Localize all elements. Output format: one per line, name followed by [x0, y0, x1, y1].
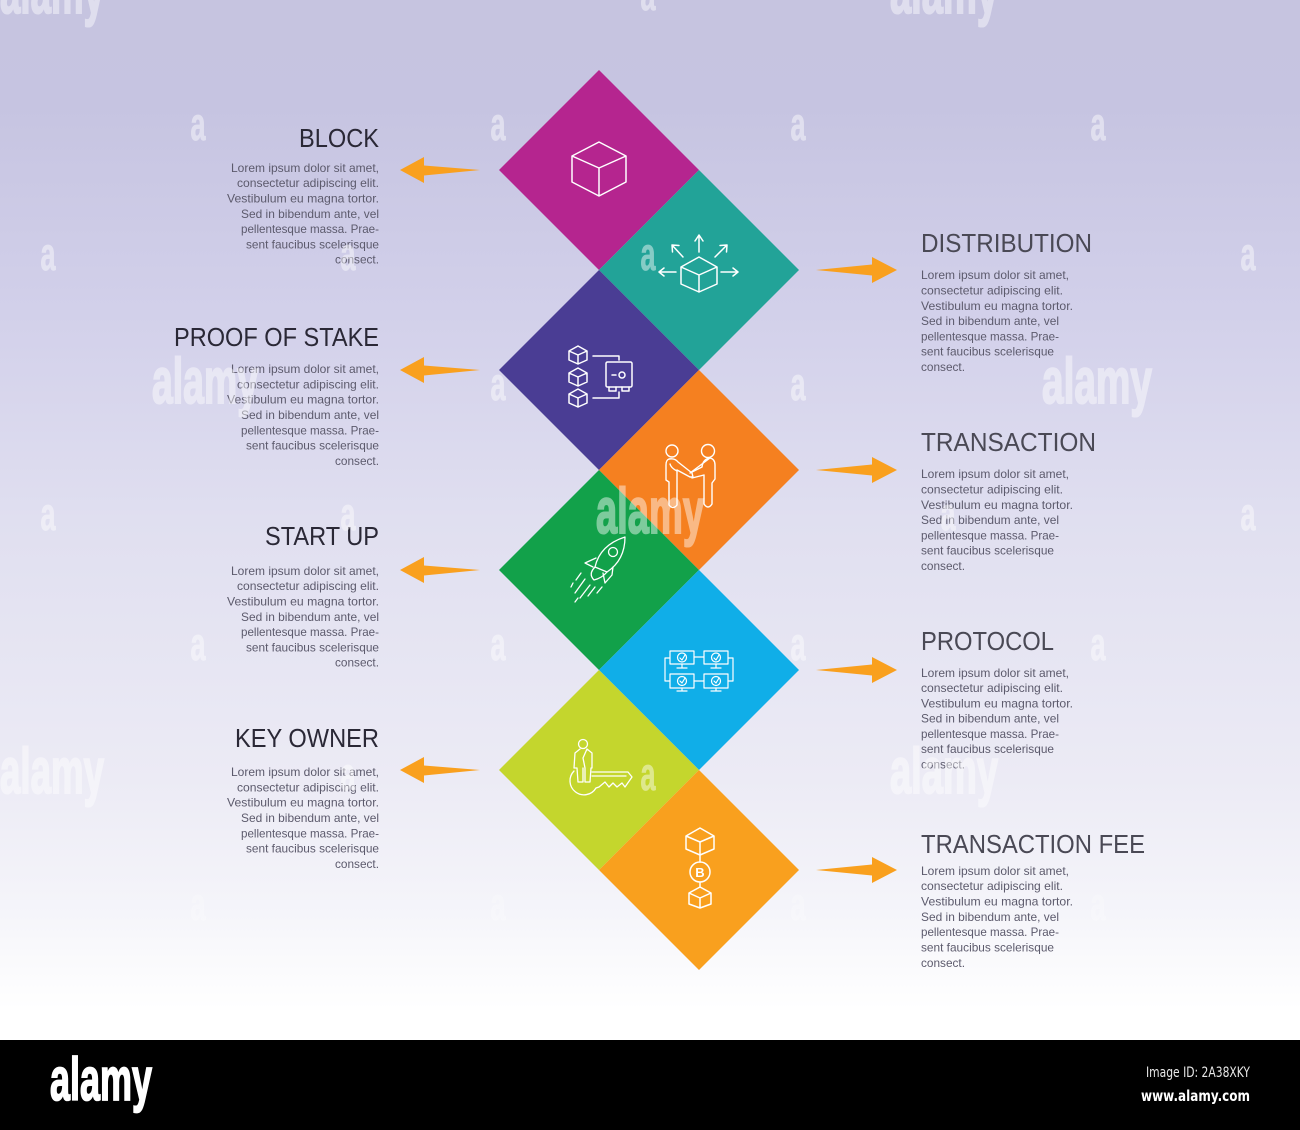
icon: rocket	[571, 537, 625, 602]
arrow: key owner	[400, 757, 480, 783]
text block: block: sent faucibus scelerisque	[246, 238, 379, 252]
watermarks: a	[940, 488, 956, 540]
text block: transaction	[921, 427, 1096, 573]
text block: proof of stake	[174, 322, 379, 468]
watermarks: a	[490, 878, 506, 930]
text block: transaction: pellentesque massa. Prae-	[921, 528, 1059, 542]
text block: transaction fee: pellentesque massa. Prae-	[921, 925, 1059, 939]
watermarks: alamy	[1042, 345, 1152, 417]
text block: proof of stake: pellentesque massa. Prae-	[241, 424, 379, 438]
watermarks: a	[640, 748, 656, 800]
text block: transaction fee: Lorem ipsum dolor sit amet,	[921, 864, 1069, 878]
text block: protocol: sent faucibus scelerisque	[921, 742, 1054, 756]
watermarks: a	[1240, 228, 1256, 280]
text block: protocol: Vestibulum eu magna tortor.	[921, 696, 1073, 710]
text block: distribution: Sed in bibendum ante, vel	[921, 314, 1059, 328]
logo: alamy	[50, 1046, 152, 1113]
heading: proof of stake: PROOF OF STAKE	[174, 322, 379, 352]
watermarks: alamy	[0, 735, 104, 807]
watermarks: a	[190, 878, 206, 930]
text block: start up	[227, 521, 379, 670]
text block: proof of stake: Sed in bibendum ante, vel	[241, 408, 379, 422]
text block: proof of stake: consectetur adipiscing elit.	[237, 378, 379, 392]
text block: start up: pellentesque massa. Prae-	[241, 625, 379, 639]
text block: protocol	[921, 626, 1073, 772]
heading: distribution: DISTRIBUTION	[921, 228, 1092, 258]
watermarks: a	[340, 488, 356, 540]
text block: block	[227, 123, 380, 266]
icon: monitor network	[665, 651, 733, 691]
text block: distribution: pellentesque massa. Prae-	[921, 330, 1059, 344]
site url: www.alamy.com	[1141, 1087, 1250, 1105]
arrow: transaction fee	[816, 857, 897, 883]
heading: protocol: PROTOCOL	[921, 626, 1054, 656]
text block: key owner	[227, 723, 379, 871]
text block: key owner: Sed in bibendum ante, vel	[241, 811, 379, 825]
watermarks: a	[640, 228, 656, 280]
diamond: block	[499, 70, 699, 270]
heading: block: BLOCK	[299, 123, 380, 153]
text block: key owner: Lorem ipsum dolor sit amet,	[231, 765, 379, 779]
arrow: transaction	[816, 457, 897, 483]
watermarks: a	[340, 748, 356, 800]
watermarks: a	[190, 618, 206, 670]
text block: transaction: Vestibulum eu magna tortor.	[921, 498, 1073, 512]
watermarks: a	[40, 488, 56, 540]
watermarks: a	[490, 98, 506, 150]
text block: proof of stake: Lorem ipsum dolor sit amet,	[231, 362, 379, 376]
diamond: transaction	[599, 370, 799, 570]
text block: transaction: sent faucibus scelerisque	[921, 544, 1054, 558]
text block: distribution	[921, 228, 1092, 374]
arrow: start up	[400, 557, 480, 583]
text block: protocol: Lorem ipsum dolor sit amet,	[921, 666, 1069, 680]
watermarks: a	[1240, 488, 1256, 540]
footer bar	[0, 1040, 1300, 1130]
text block: start up: sent faucibus scelerisque	[246, 640, 379, 654]
watermarks	[0, 0, 1256, 930]
panel: diamonds and icons	[499, 70, 799, 970]
watermarks: a	[790, 878, 806, 930]
icon label: bitcoin glyph: B	[695, 865, 705, 880]
text block: block: consect.	[335, 252, 379, 266]
text block: distribution: Vestibulum eu magna tortor.	[921, 299, 1073, 313]
text block: transaction fee: Sed in bibendum ante, vel	[921, 910, 1059, 924]
text block: distribution: sent faucibus scelerisque	[921, 344, 1054, 358]
heading: key owner: KEY OWNER	[235, 723, 379, 753]
text block: proof of stake: Vestibulum eu magna tortor.	[227, 392, 379, 406]
watermarks: a	[790, 98, 806, 150]
text block: transaction: Sed in bibendum ante, vel	[921, 513, 1059, 527]
text block: transaction fee: sent faucibus scelerisque	[921, 940, 1054, 954]
text block: proof of stake: sent faucibus scelerisque	[246, 438, 379, 452]
heading: transaction fee: TRANSACTION FEE	[921, 829, 1145, 859]
icon: handshake	[666, 444, 715, 508]
arrow: distribution	[816, 257, 897, 283]
icon: cubes and safe	[569, 346, 632, 407]
text block: start up: consect.	[335, 656, 379, 670]
watermarks: a	[1090, 98, 1106, 150]
icon: bitcoin chain	[686, 828, 714, 908]
watermarks: a	[340, 228, 356, 280]
text block: start up: Sed in bibendum ante, vel	[241, 610, 379, 624]
diamond: proof of stake	[499, 270, 699, 470]
heading: transaction: TRANSACTION	[921, 427, 1096, 457]
text block: protocol: pellentesque massa. Prae-	[921, 727, 1059, 741]
icon: cube	[572, 142, 626, 196]
image id: Image ID: 2A38XKY	[1146, 1065, 1250, 1081]
text block: transaction: consectetur adipiscing elit.	[921, 482, 1063, 496]
text block: transaction fee: consect.	[921, 956, 965, 970]
text block: key owner: sent faucibus scelerisque	[246, 842, 379, 856]
text block: key owner: pellentesque massa. Prae-	[241, 826, 379, 840]
text block: block: Vestibulum eu magna tortor.	[227, 192, 379, 206]
arrow: protocol	[816, 657, 897, 683]
watermarks: a	[790, 618, 806, 670]
watermarks: a	[1090, 878, 1106, 930]
diamond: key owner	[499, 670, 699, 870]
text block: distribution: consectetur adipiscing elit.	[921, 284, 1063, 298]
icon: cube with arrows	[659, 235, 738, 292]
text block: proof of stake: consect.	[335, 454, 379, 468]
text block: key owner: consectetur adipiscing elit.	[237, 780, 379, 794]
watermarks: a	[190, 98, 206, 150]
watermarks: a	[490, 358, 506, 410]
text block: start up: consectetur adipiscing elit.	[237, 579, 379, 593]
watermarks: alamy	[596, 475, 704, 547]
text block: start up: Lorem ipsum dolor sit amet,	[231, 564, 379, 578]
heading: start up: START UP	[265, 521, 379, 551]
diamond: distribution	[599, 170, 799, 370]
text block: transaction: Lorem ipsum dolor sit amet,	[921, 467, 1069, 481]
watermarks: alamy	[890, 735, 998, 807]
text block: key owner: Vestibulum eu magna tortor.	[227, 796, 379, 810]
text block: transaction: consect.	[921, 559, 965, 573]
text block: transaction fee	[921, 829, 1145, 970]
text block: key owner: consect.	[335, 857, 379, 871]
text block: distribution: Lorem ipsum dolor sit amet,	[921, 268, 1069, 282]
diamond: start up	[499, 470, 699, 670]
text block: protocol: consectetur adipiscing elit.	[921, 681, 1063, 695]
watermarks: alamy	[152, 345, 258, 417]
arrow: block	[400, 157, 480, 183]
text block: block: Sed in bibendum ante, vel	[241, 207, 379, 221]
text block: block: consectetur adipiscing elit.	[237, 176, 379, 190]
watermarks: a	[490, 618, 506, 670]
text block: transaction fee: Vestibulum eu magna tortor.	[921, 894, 1073, 908]
watermarks: a	[1090, 618, 1106, 670]
text block: protocol: consect.	[921, 758, 965, 772]
text block: block: pellentesque massa. Prae-	[241, 222, 379, 236]
watermarks: a	[40, 228, 56, 280]
arrow: proof of stake	[400, 357, 480, 383]
text block: protocol: Sed in bibendum ante, vel	[921, 712, 1059, 726]
diamond: protocol	[599, 570, 799, 770]
icon: key owner	[570, 740, 632, 795]
text block: start up: Vestibulum eu magna tortor.	[227, 594, 379, 608]
watermarks: a	[790, 358, 806, 410]
text block: block: Lorem ipsum dolor sit amet,	[231, 161, 379, 175]
text block: transaction fee: consectetur adipiscing elit.	[921, 879, 1063, 893]
text block: distribution: consect.	[921, 360, 965, 374]
diamond: transaction fee	[599, 770, 799, 970]
